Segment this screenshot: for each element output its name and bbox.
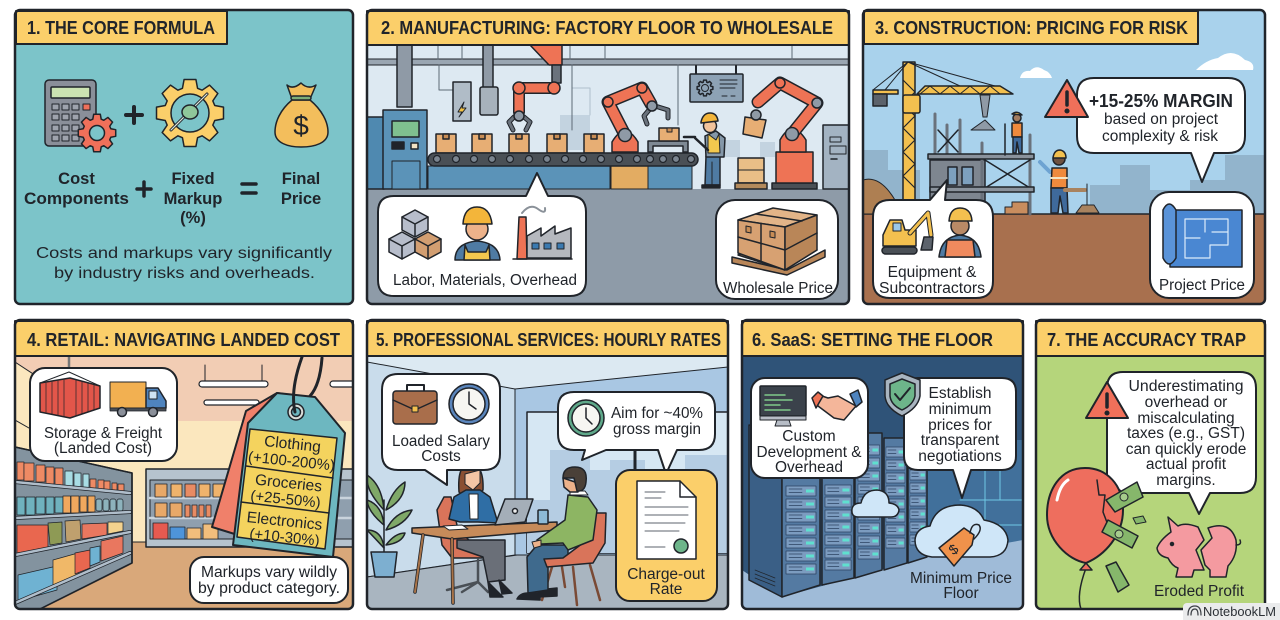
scene: store interior <box>15 356 360 609</box>
callout: margin: based on project <box>1104 111 1219 128</box>
callout: storage and freight <box>30 356 177 461</box>
callout: wholesale price <box>716 200 838 299</box>
card: charge-out rate <box>616 470 717 601</box>
callout: establish minimum prices: minimum <box>929 401 991 418</box>
packing table with box <box>648 128 688 152</box>
callout: custom development: Development & <box>756 444 862 461</box>
callout: markups vary <box>190 557 348 603</box>
heading: saas <box>742 321 1023 356</box>
robot arm: holding box <box>743 78 822 189</box>
panel: 3. construction <box>863 10 1265 304</box>
scaffolding and building <box>928 114 1034 214</box>
callout: labor, materials, overhead: Labor, Materials, Overhead <box>393 272 577 289</box>
icon: blueprint <box>1163 204 1242 267</box>
label: final price: Price <box>281 190 321 208</box>
icon: shield check <box>885 373 920 416</box>
callout: establish minimum prices: Establish <box>929 385 991 402</box>
conveyor belt <box>428 153 698 166</box>
icon: markup gear <box>157 80 223 146</box>
heading: professional services: 5. PROFESSIONAL SERVICES: HOURLY RATES <box>376 329 721 350</box>
label: fixed markup: Fixed <box>171 170 215 188</box>
heading: construction <box>864 11 1198 44</box>
icon: calculator with gear <box>45 80 116 152</box>
icon: monitor with code <box>760 386 806 426</box>
icon: broken piggy bank <box>1157 517 1240 577</box>
panel: 7. the accuracy trap <box>1036 320 1265 609</box>
text: formula note <box>36 245 332 282</box>
callout: aim for 40%: gross margin <box>613 421 701 438</box>
panel: 6. saas <box>742 320 1023 609</box>
callout: storage and freight: (Landed Cost) <box>54 440 152 457</box>
label: fixed markup: Markup <box>164 190 222 208</box>
robot arm: overhead <box>509 45 562 130</box>
price tag with markup ranges: Groceries <box>254 472 323 496</box>
icon: small cloud <box>852 490 899 517</box>
workers on site <box>1005 112 1099 213</box>
callout: loaded salary costs: Loaded Salary <box>392 433 490 450</box>
man in chair <box>517 467 606 605</box>
callout: establish minimum prices: prices for <box>928 417 992 434</box>
icon: clock blue <box>449 384 489 424</box>
heading: manufacturing <box>367 11 849 45</box>
woman at desk <box>437 464 512 597</box>
icon: excavator <box>882 213 933 254</box>
text: formula note: Costs and markups vary significantly <box>36 245 332 262</box>
heading: manufacturing: 2. MANUFACTURING: FACTORY FLOOR TO WHOLESALE <box>381 17 833 38</box>
icon: handshake <box>812 390 862 420</box>
icon: torn balloon with money <box>1047 468 1146 609</box>
label: eroded profit: Eroded Profit <box>1154 583 1245 600</box>
callout: underestimating overhead: taxes (e.g., GST) <box>1127 425 1245 442</box>
icon: site worker <box>939 208 981 257</box>
panel: 4. retail <box>15 320 360 609</box>
callout: margin: +15-25% MARGIN <box>1089 91 1233 111</box>
callout: underestimating overhead: miscalculating <box>1137 410 1235 427</box>
operator: plus <box>137 182 151 196</box>
sign, machine, crate <box>690 66 853 189</box>
callout: margin <box>1077 78 1245 182</box>
price tag with markup ranges: Clothing <box>263 433 322 456</box>
card: charge-out rate: Charge-out <box>627 566 705 583</box>
heading: the core formula <box>16 11 227 44</box>
icon: factory <box>513 207 572 259</box>
panel: 1. the core formula <box>15 10 353 304</box>
callout: wholesale price: Wholesale Price <box>723 280 833 297</box>
callout: aim for 40% <box>558 392 715 474</box>
robot arm: center <box>603 83 668 152</box>
callout: markups vary: Markups vary wildly <box>201 564 337 581</box>
callout: underestimating overhead: margins. <box>1156 472 1216 489</box>
price tag with markup ranges: (+100-200%) <box>247 449 336 475</box>
icon: briefcase <box>393 385 437 424</box>
plant <box>367 475 412 577</box>
icon: delivery truck <box>110 382 166 416</box>
callout: establish minimum prices: transparent <box>921 432 1000 449</box>
heading: accuracy trap <box>1036 321 1265 356</box>
callout: storage and freight: Storage & Freight <box>44 425 163 442</box>
callout: loaded salary costs: Costs <box>421 448 461 465</box>
crane <box>873 62 1013 200</box>
icon: money bag: $ <box>293 110 309 141</box>
icon: warning triangle <box>1045 80 1088 117</box>
callout: custom development: Custom <box>782 428 836 445</box>
heading: professional services <box>367 321 728 356</box>
price tag with markup ranges: (+10-30%) <box>249 525 320 550</box>
price tag with markup ranges: (+25-50%) <box>250 487 321 512</box>
callout: underestimating overhead: actual profit <box>1146 456 1227 473</box>
callout: establish minimum prices <box>904 378 1016 498</box>
label: final price: Final <box>282 170 320 188</box>
panel: 2. manufacturing <box>360 10 853 304</box>
icon: cloud with price tag <box>915 505 1008 566</box>
price tag with markup ranges <box>212 357 345 557</box>
callout: custom development: Overhead <box>775 459 843 476</box>
worker with scanner <box>684 113 725 188</box>
callout: loaded salary costs <box>382 374 500 485</box>
label: fixed markup: (%) <box>180 209 206 227</box>
icon: plus between calculator and gear <box>126 107 142 123</box>
callout: underestimating overhead <box>1107 372 1256 514</box>
label: minimum price floor: Minimum Price <box>910 570 1012 587</box>
icon: money bag <box>275 83 328 147</box>
icon: warning triangle <box>1086 382 1128 418</box>
heading: retail <box>15 321 353 356</box>
heading: accuracy trap: 7. THE ACCURACY TRAP <box>1047 329 1246 350</box>
callout: equipment and subcontractors <box>873 180 993 298</box>
callout: project price: Project Price <box>1159 277 1245 294</box>
operator: equals <box>242 184 256 193</box>
icon: worker <box>455 207 500 260</box>
label: fixed markup <box>164 170 222 227</box>
left shelf <box>15 447 132 609</box>
label: minimum price floor <box>910 570 1012 602</box>
label: minimum price floor: Floor <box>943 585 979 602</box>
desk with laptop and cup <box>412 499 557 603</box>
icon: material cubes <box>389 210 441 259</box>
card: charge-out rate: Rate <box>650 581 682 598</box>
label: final price <box>281 170 321 208</box>
callout: establish minimum prices: negotiations <box>918 448 1002 465</box>
callout: labor, materials, overhead <box>378 173 586 296</box>
callout: underestimating overhead: Underestimating <box>1128 378 1244 395</box>
callout: markups vary: by product category. <box>198 580 340 597</box>
callout: project price <box>1150 192 1254 298</box>
label: cost components: Cost <box>58 170 95 188</box>
text: formula note: by industry risks and overheads. <box>54 265 315 282</box>
scene: construction site <box>863 10 1265 304</box>
scene: office <box>367 356 728 609</box>
panel: 5. professional services <box>367 320 728 609</box>
icon: document <box>637 481 696 559</box>
callout: underestimating overhead: overhead or <box>1145 394 1227 411</box>
badge: NotebookLM: NotebookLM <box>1203 604 1276 619</box>
heading: retail: 4. RETAIL: NAVIGATING LANDED COST <box>27 329 341 350</box>
callout: equipment and subcontractors: Equipment & <box>888 264 977 281</box>
scene: factory floor <box>360 45 849 304</box>
callout: custom development <box>751 378 868 478</box>
heading: saas: 6. SaaS: SETTING THE FLOOR <box>752 329 993 350</box>
callout: aim for 40%: Aim for ~40% <box>611 405 703 422</box>
callout: margin: complexity & risk <box>1102 128 1218 145</box>
icon: shipping container <box>40 372 100 418</box>
badge: NotebookLM <box>1183 603 1280 620</box>
label: cost components <box>24 170 129 208</box>
label: cost components: Components <box>24 190 129 208</box>
icon: clock green <box>568 400 604 436</box>
icon: pallet of boxes <box>732 208 825 275</box>
callout: underestimating overhead: can quickly erode <box>1126 441 1246 458</box>
heading: the core formula: 1. THE CORE FORMULA <box>27 17 215 38</box>
price tag with markup ranges: Electronics <box>246 509 323 534</box>
icon: cloud with price tag: $ <box>945 540 962 558</box>
scene: server room <box>742 356 1023 609</box>
heading: construction: 3. CONSTRUCTION: PRICING FOR RISK <box>875 17 1189 38</box>
center shelf <box>146 469 358 547</box>
callout: equipment and subcontractors: Subcontractors <box>879 280 985 297</box>
